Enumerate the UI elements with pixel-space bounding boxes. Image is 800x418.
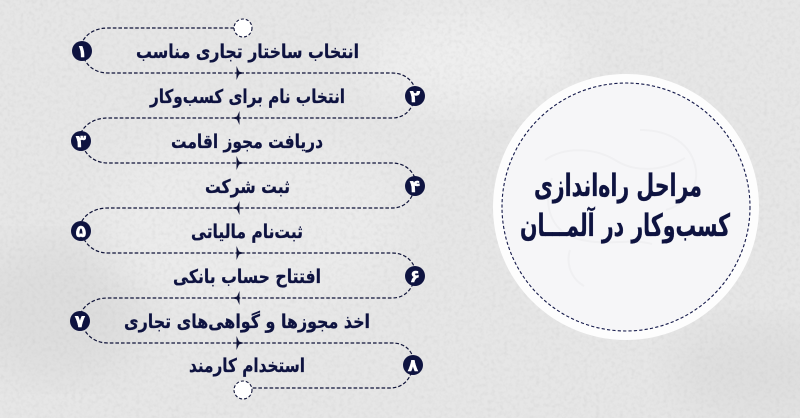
step 1: انتخاب ساختار تجاری مناسب bbox=[136, 41, 359, 63]
watermark logo bbox=[545, 130, 696, 286]
step 4: ۴ bbox=[410, 177, 420, 197]
step 3: ۳ bbox=[76, 132, 87, 152]
step 2: انتخاب نام برای کسب‌وکار bbox=[149, 86, 345, 108]
step 7: ۷ bbox=[75, 312, 86, 332]
step 2: ۲ bbox=[410, 87, 421, 107]
step 7 bbox=[70, 310, 370, 333]
title: مراحل راه‌اندازی bbox=[534, 168, 702, 204]
step 7: اخذ مجوزها و گواهی‌های تجاری bbox=[124, 310, 370, 333]
step 8: استخدام کارمند bbox=[189, 355, 305, 377]
step 1 bbox=[72, 41, 359, 63]
step 3 bbox=[71, 131, 323, 153]
step 6: افتتاح حساب بانکی bbox=[173, 266, 321, 288]
title bbox=[520, 168, 731, 244]
dashed route path bbox=[80, 28, 416, 388]
dashed ring bbox=[502, 83, 750, 331]
step 5: ۵ bbox=[76, 222, 86, 242]
end node bbox=[234, 381, 252, 399]
step 1: ۱ bbox=[77, 42, 87, 62]
panel: title circle bbox=[493, 74, 759, 340]
step 8: ۸ bbox=[408, 356, 419, 376]
step 6: ۶ bbox=[410, 267, 420, 287]
step 4 bbox=[205, 176, 425, 198]
step 4: ثبت شرکت bbox=[205, 176, 290, 198]
step 3: دریافت مجوز اقامت bbox=[171, 131, 323, 153]
arrows on route bbox=[232, 66, 244, 350]
step 8 bbox=[189, 355, 423, 377]
step 5: ثبت‌نام مالیاتی bbox=[191, 221, 303, 243]
step 5 bbox=[71, 221, 303, 243]
start node bbox=[234, 19, 252, 37]
